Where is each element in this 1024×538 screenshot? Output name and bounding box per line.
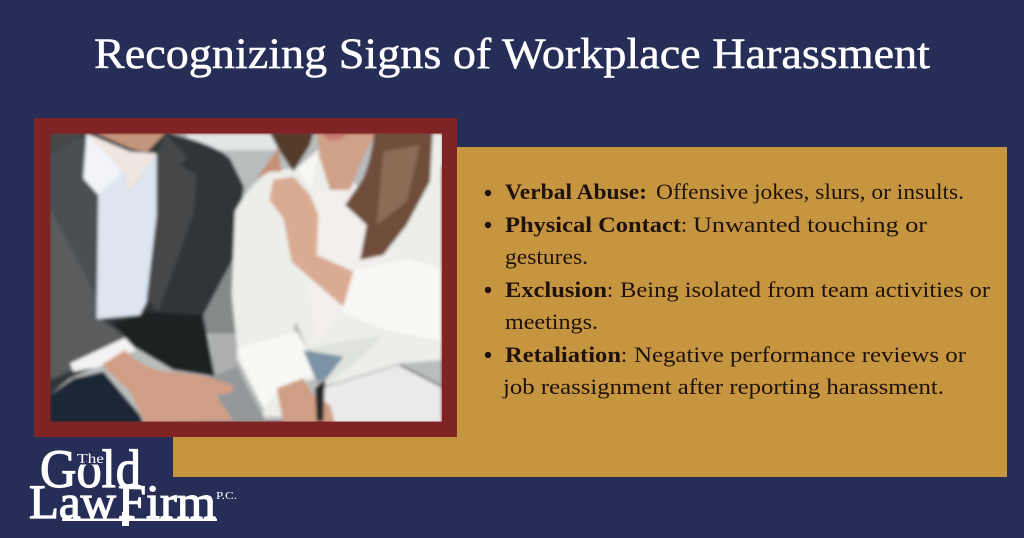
logo: The Gold Law Firm P.C.: Law <box>29 476 116 529</box>
woman's shirt <box>232 133 442 417</box>
item: retaliation: Negative performance reviews or <box>634 342 967 367</box>
hair <box>270 133 313 172</box>
logo: The Gold Law Firm P.C.: Gold <box>40 439 141 499</box>
item: retaliation: : <box>621 342 627 367</box>
item: retaliation: Retaliation <box>505 342 621 367</box>
item: retaliation: job reassignment after reporting harassment. <box>502 374 944 399</box>
item: physical contact: gestures. <box>505 244 588 269</box>
logo: The Gold Law Firm P.C. <box>29 439 237 529</box>
item: exclusion <box>485 277 991 334</box>
item: verbal abuse: Offensive jokes, slurs, or insults. <box>656 179 964 204</box>
item: exclusion: Exclusion <box>505 277 607 302</box>
item: physical contact: Physical Contact <box>505 212 682 237</box>
face and neck <box>317 133 375 190</box>
logo: The Gold Law Firm P.C.: The <box>77 452 104 467</box>
item: verbal abuse <box>485 179 964 204</box>
item: exclusion: : <box>607 277 613 302</box>
bulleted list <box>485 179 991 399</box>
title: Recognizing Signs of Workplace Harassment <box>94 31 930 78</box>
jacket <box>50 133 244 395</box>
item: physical contact: : <box>681 212 687 237</box>
man's shirt <box>94 152 160 322</box>
item: exclusion: Being isolated from team activities or <box>620 277 991 302</box>
man's hand <box>102 350 233 423</box>
jeans <box>303 350 343 382</box>
item: retaliation <box>485 342 967 399</box>
man's trousers and cuff <box>50 372 143 423</box>
panel: gold text background <box>173 147 1007 477</box>
photo: man and woman seated on sofa <box>50 133 443 423</box>
table <box>323 365 442 423</box>
hands <box>257 148 282 178</box>
item: physical contact <box>485 212 928 269</box>
item: exclusion: meetings. <box>505 309 598 334</box>
item: physical contact: Unwanted touching or <box>693 212 928 237</box>
woman's knee <box>140 367 268 423</box>
panel: photo frame <box>34 118 457 437</box>
item: verbal abuse: Verbal Abuse: <box>505 179 647 204</box>
logo: The Gold Law Firm P.C.: P.C. <box>216 490 237 502</box>
logo: The Gold Law Firm P.C.: Firm <box>118 476 216 529</box>
